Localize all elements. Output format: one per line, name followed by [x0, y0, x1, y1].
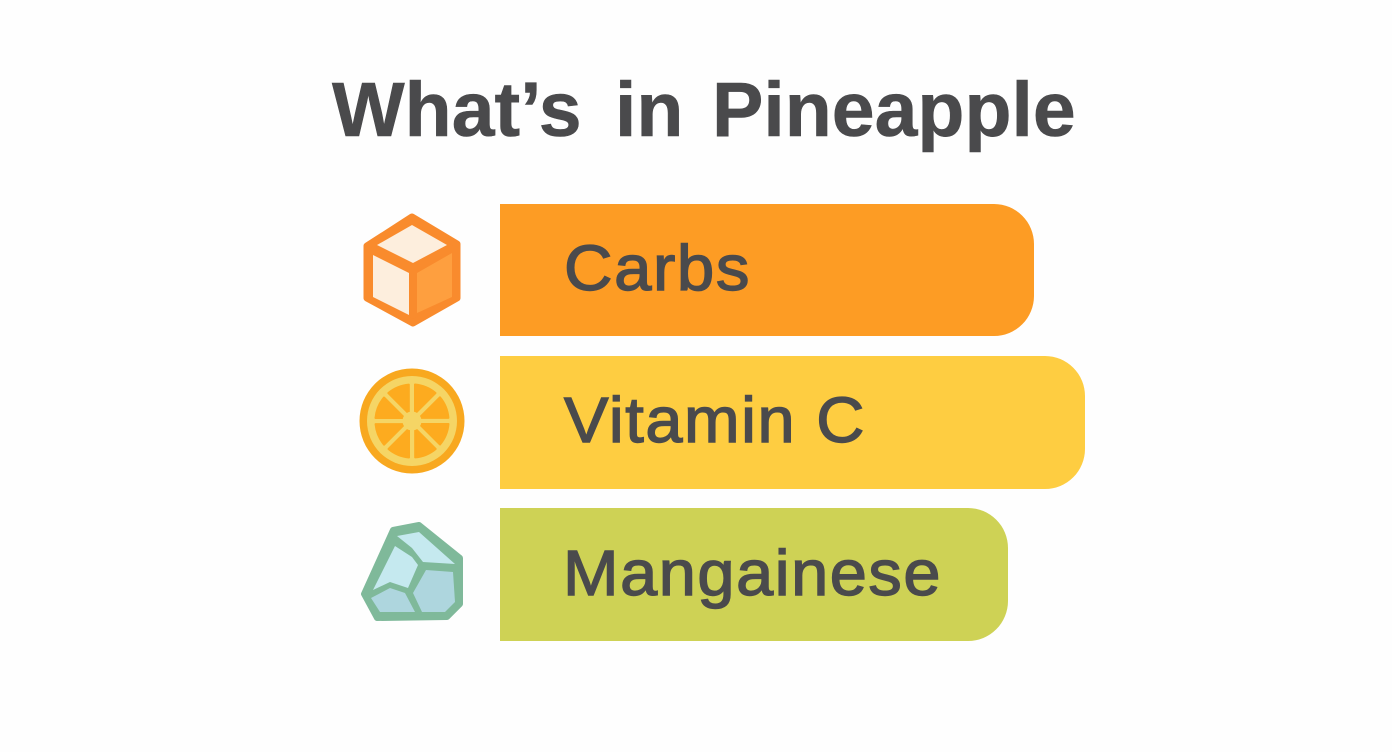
bar: manganese [500, 508, 1008, 641]
label: vitamin c: Vitamin C [564, 384, 866, 456]
bar: carbs [500, 204, 1034, 336]
row: vitamin c [360, 356, 1085, 489]
bar: vitamin c [500, 356, 1085, 489]
icon: sugar cube [367, 217, 457, 323]
row: manganese [364, 508, 1008, 641]
title: in [615, 67, 683, 153]
label: carbs: Carbs [564, 232, 751, 304]
icon: mineral crystal [364, 525, 460, 618]
icon: citrus slice [360, 368, 464, 474]
label: manganese: Mangainese [563, 537, 942, 609]
row: carbs [367, 204, 1034, 336]
title: What’s [332, 67, 582, 153]
title: Pineapple [712, 67, 1076, 153]
